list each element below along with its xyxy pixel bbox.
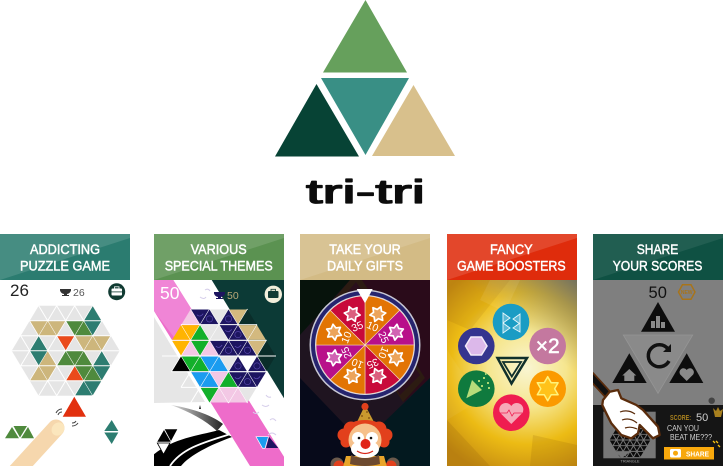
green piece xyxy=(5,426,34,438)
game over screen xyxy=(590,280,723,466)
teal piece xyxy=(104,420,118,444)
header: addicting puzzle game xyxy=(0,234,130,280)
header: fancy game boosters xyxy=(447,234,577,280)
header: addicting puzzle game: PUZZLE GAME xyxy=(20,259,110,274)
challenge text: BEAT ME??? xyxy=(670,432,712,442)
best score trophy: 50 xyxy=(227,290,239,302)
pointing hand xyxy=(602,390,660,438)
panel: share your scores xyxy=(590,234,723,466)
booster: star xyxy=(529,370,566,407)
wheel pointer xyxy=(357,289,373,303)
header: various special themes: SPECIAL THEMES xyxy=(165,259,273,274)
sound icon xyxy=(708,398,715,404)
header: share your scores: SHARE xyxy=(637,242,678,257)
pink band xyxy=(154,280,284,466)
header: various special themes: VARIOUS xyxy=(191,242,247,257)
wheel segment 10: 10 xyxy=(339,330,355,345)
booster: triangles xyxy=(493,304,529,340)
heart triangle button xyxy=(669,353,703,383)
restart icon xyxy=(648,344,671,367)
wheel segment 35: 35 xyxy=(350,319,365,335)
header: fancy game boosters: GAME BOOSTERS xyxy=(457,259,566,274)
header: various special themes xyxy=(154,234,284,280)
header: addicting puzzle game: ADDICTING xyxy=(30,242,100,257)
header: share your scores: YOUR SCORES xyxy=(613,259,702,274)
header: take your daily gifts: TAKE YOUR xyxy=(329,242,401,257)
logo wordmark: tri-tri xyxy=(306,173,425,210)
shared screenshot card: TRIANGLE xyxy=(620,460,640,464)
hexagon puzzle board xyxy=(12,306,120,396)
arm xyxy=(590,375,611,398)
new badge: NEW xyxy=(681,290,693,296)
crown xyxy=(713,407,723,417)
score: 50 xyxy=(160,283,180,303)
wheel segment 35: 35 xyxy=(365,355,380,371)
grey background shape xyxy=(154,317,205,403)
new badge xyxy=(678,285,695,299)
tap marks xyxy=(56,409,78,426)
road illustration xyxy=(154,405,232,466)
wheel segment 10: 10 xyxy=(350,355,365,371)
briefcase button xyxy=(265,286,282,303)
briefcase button xyxy=(108,283,125,300)
panel: fancy game boosters xyxy=(447,234,577,466)
share button xyxy=(664,447,714,460)
panel: various special themes xyxy=(154,234,284,466)
stats triangle button xyxy=(641,302,675,332)
wheel segment 10: 10 xyxy=(365,319,380,335)
center triangle emblem xyxy=(498,358,527,384)
active red triangle xyxy=(63,397,86,417)
restart triangle xyxy=(623,335,693,393)
blue piece xyxy=(256,437,278,448)
score label: SCORE: xyxy=(670,415,691,422)
header: share your scores xyxy=(593,234,723,280)
challenge text: CAN YOU xyxy=(667,423,699,433)
booster: confetti xyxy=(458,370,495,407)
final score: 50 xyxy=(649,284,667,302)
dark wheel screen xyxy=(300,280,430,466)
score: 26 xyxy=(10,281,29,300)
header: take your daily gifts: DAILY GIFTS xyxy=(327,259,403,274)
booster: times two xyxy=(529,328,566,364)
challenge text xyxy=(667,423,712,442)
black piece xyxy=(157,429,177,454)
boosters screen xyxy=(447,280,577,466)
shared screenshot card xyxy=(603,412,656,464)
decorative squiggles xyxy=(200,289,276,435)
score label xyxy=(670,412,708,424)
share button: SHARE xyxy=(686,450,709,458)
themed game screen xyxy=(154,280,284,466)
best score trophy: 26 xyxy=(73,287,85,299)
booster: gem hexagon xyxy=(458,328,495,364)
clown xyxy=(330,403,400,466)
finger xyxy=(14,420,67,466)
header: fancy game boosters: FANCY xyxy=(490,242,533,257)
sparks xyxy=(713,441,720,447)
panel: take your daily gifts xyxy=(300,234,430,466)
wheel segment 10: 10 xyxy=(375,345,391,360)
dark green background shape xyxy=(212,280,284,398)
prize wheel xyxy=(310,290,420,400)
panel: addicting puzzle game xyxy=(0,234,130,466)
wheel segment 25: 25 xyxy=(375,330,391,345)
header: take your daily gifts xyxy=(300,234,430,280)
wheel segment 25: 25 xyxy=(339,345,355,360)
hexagon puzzle board xyxy=(162,309,276,403)
best score trophy xyxy=(60,289,84,296)
game screen xyxy=(0,280,130,466)
score label: 50 xyxy=(696,412,708,424)
home triangle button xyxy=(612,353,647,383)
best score trophy xyxy=(214,292,238,299)
booster: heart xyxy=(493,394,530,431)
booster: times two: ×2 xyxy=(536,335,560,358)
logo: triangles xyxy=(275,0,455,156)
